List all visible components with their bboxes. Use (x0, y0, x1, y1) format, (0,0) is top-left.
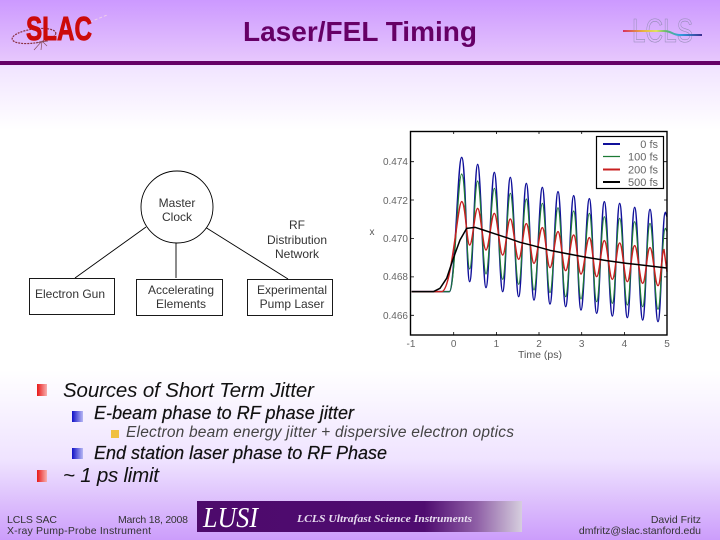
node: Electron Gun (30, 278, 114, 314)
y axis labels (383, 157, 408, 322)
y axis labels: 0.466 (383, 311, 408, 322)
footer left text: March 18, 2008 (118, 514, 188, 526)
x axis labels: 4 (622, 339, 628, 350)
label: RF Distribution Network: RF (289, 218, 305, 232)
node: Experimental Pump Laser (248, 280, 332, 316)
footer left text: LCLS SAC (7, 514, 57, 526)
node: Master Clock (141, 171, 213, 243)
node: Accelerating Elements: Accelerating (148, 283, 214, 297)
label: RF Distribution Network (267, 218, 327, 261)
node: Master Clock: Clock (162, 210, 193, 224)
icon: LCLS logo: LCLS (632, 12, 693, 49)
y axis labels: 0.472 (383, 196, 408, 207)
chart legend: 0 fs (640, 139, 658, 151)
node: Master Clock: Master (159, 196, 195, 210)
line chart: x vs time (370, 131, 670, 361)
node: Accelerating Elements: Elements (156, 297, 206, 311)
y axis labels: 0.470 (383, 234, 408, 245)
node: Accelerating Elements (136, 280, 222, 316)
x axis labels: -1 (407, 339, 416, 350)
y axis labels: 0.468 (383, 272, 408, 283)
series: 0 fs (412, 157, 667, 322)
node: Experimental Pump Laser: Pump Laser (260, 297, 324, 311)
bullet: Electron beam energy jitter + dispersive electron optics: Electron beam energy jitter + dispersive electron optics (126, 424, 514, 441)
x axis labels (407, 339, 670, 350)
plot frame (410, 132, 667, 335)
y axis labels: 0.474 (383, 157, 408, 168)
timing distribution diagram (30, 171, 332, 316)
x axis title: Time (ps) (518, 349, 562, 361)
x axis labels: 5 (664, 339, 670, 350)
footer left text (7, 514, 188, 537)
series: 200 fs (412, 202, 667, 292)
label: RF Distribution Network: Distribution (267, 233, 327, 247)
chart legend (596, 136, 664, 189)
footer right text: David Fritz (651, 514, 701, 526)
node: Experimental Pump Laser: Experimental (257, 283, 327, 297)
connector lines (75, 227, 288, 279)
header rule (0, 61, 720, 65)
series: 500 fs (412, 227, 667, 292)
footer banner: LUSI (197, 501, 522, 534)
footer banner: LUSI: LCLS Ultrafast Science Instruments (296, 513, 472, 525)
chart legend: 500 fs (628, 177, 658, 189)
bullet: ~ 1 ps limit: ~ 1 ps limit (63, 464, 160, 487)
x axis labels: 1 (494, 339, 500, 350)
icon: SLAC logo: SLAC (26, 10, 92, 47)
x axis labels: 0 (451, 339, 457, 350)
y axis title: x (370, 227, 374, 238)
bullet list (37, 379, 514, 487)
label: RF Distribution Network: Network (275, 247, 320, 261)
bullet: E-beam phase to RF phase jitter: E-beam phase to RF phase jitter (94, 403, 355, 423)
bullet: Sources of Short Term Jitter: Sources of Short Term Jitter (63, 379, 315, 402)
chart legend: 100 fs (628, 152, 658, 164)
bullet: End station laser phase to RF Phase: End station laser phase to RF Phase (94, 443, 387, 463)
x axis labels: 2 (536, 339, 542, 350)
footer banner: LUSI: LUSI (202, 502, 259, 534)
footer right text (579, 514, 701, 537)
x axis labels: 3 (579, 339, 585, 350)
footer right text: dmfritz@slac.stanford.edu (579, 525, 701, 537)
footer left text: X-ray Pump-Probe Instrument (7, 525, 151, 537)
node: Electron Gun: Electron Gun (35, 287, 105, 301)
title: Laser/FEL Timing (243, 16, 477, 47)
chart legend: 200 fs (628, 164, 658, 176)
series: 100 fs (412, 174, 667, 309)
